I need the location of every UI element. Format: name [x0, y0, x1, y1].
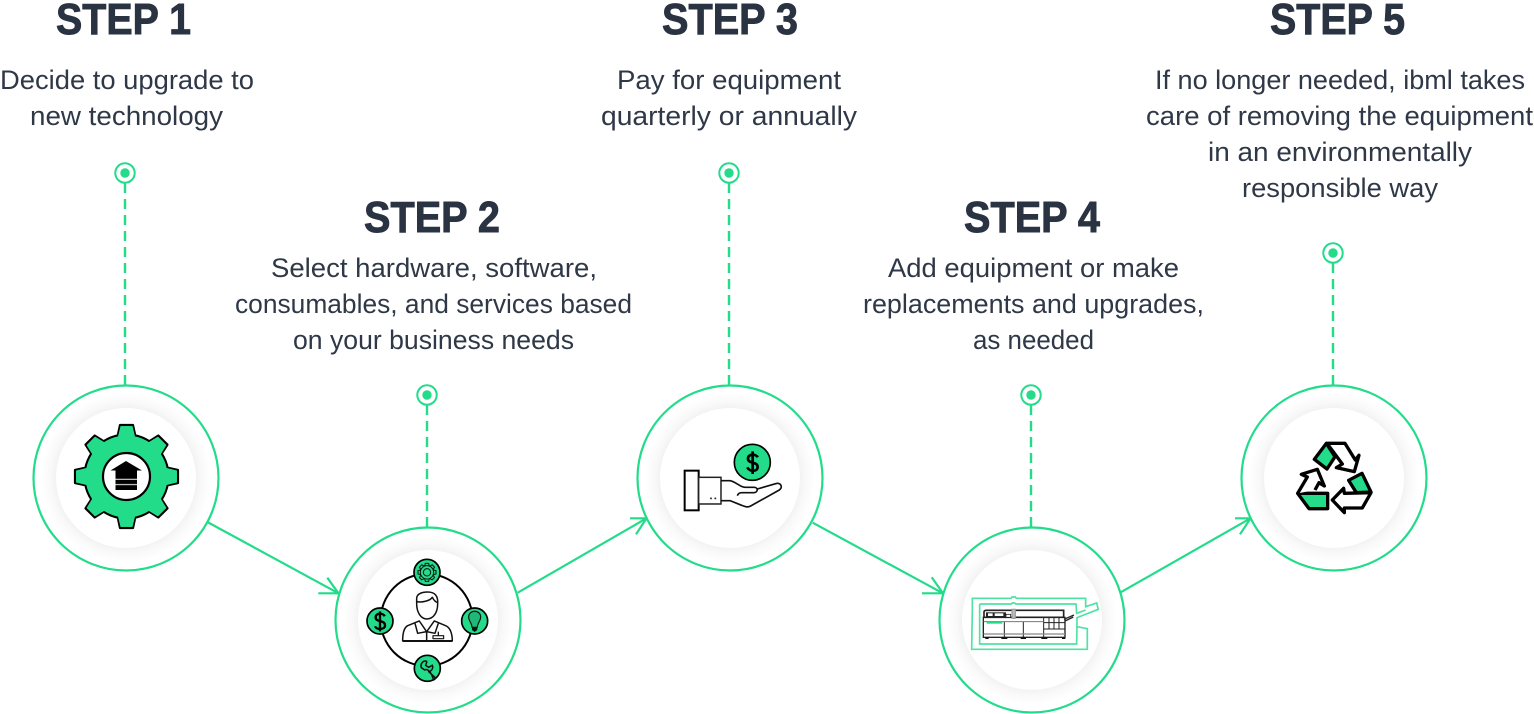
circle: step 3 [638, 386, 822, 570]
icon: recycling arrows [1298, 443, 1371, 513]
icon: person with four service badges [367, 559, 488, 681]
step 5 heading and text: If no longer needed, ibml takes [1155, 65, 1525, 95]
connector: step 4 pin [1021, 385, 1041, 527]
step 4 heading and text: Add equipment or make [888, 253, 1179, 283]
arrow: step 2 to step 3 [518, 518, 646, 593]
coin [734, 444, 770, 480]
step 1 heading and text: new technology [30, 101, 224, 131]
connector: step 2 pin [417, 385, 437, 527]
arrow: step 4 to step 5 [1120, 518, 1250, 593]
step 2 heading and text: consumables, and services based [235, 289, 632, 319]
connector: step 5 pin [1323, 243, 1343, 385]
step 5 heading and text: responsible way [1242, 173, 1438, 203]
badge: gear [414, 559, 440, 585]
badge: wrench [414, 655, 440, 681]
connector: step 3 pin [719, 163, 739, 385]
circle: step 4 [940, 528, 1124, 712]
step 5 heading and text [1146, 0, 1534, 203]
step 3 heading and text: Pay for equipment [617, 65, 842, 95]
arrow: step 3 to step 4 [813, 523, 943, 593]
circle: step 5 [1242, 386, 1426, 570]
step 4 heading and text: as needed [973, 325, 1094, 355]
step 2 heading and text: on your business needs [293, 325, 574, 355]
connector: step 1 pin [115, 163, 135, 385]
person [402, 592, 453, 641]
outline: green machine halo [972, 597, 1098, 649]
step 5 heading and text: care of removing the equipment [1146, 101, 1534, 131]
step 2 heading and text: STEP 2 [364, 193, 500, 242]
badge: dollar [367, 608, 393, 634]
arrow: step 1 to step 2 [207, 522, 338, 593]
circle: step 2 [336, 528, 520, 712]
step 2 heading and text [235, 193, 632, 355]
icon: hand with coin [685, 444, 781, 510]
step 4 heading and text: replacements and upgrades, [863, 289, 1204, 319]
icon: gear with upward arrow [75, 425, 178, 528]
step 3 heading and text [601, 0, 858, 131]
step 4 heading and text [863, 193, 1204, 355]
step 2 heading and text: Select hardware, software, [271, 253, 597, 283]
circle: step 1 [34, 386, 218, 570]
badge: light bulb [462, 608, 488, 634]
icon: production scanner machine [972, 597, 1098, 649]
machine body [983, 609, 1074, 637]
step 1 heading and text [0, 0, 254, 131]
step 4 heading and text: STEP 4 [964, 193, 1100, 242]
step 3 heading and text: quarterly or annually [601, 101, 858, 131]
step 1 heading and text: Decide to upgrade to [0, 65, 254, 95]
step 5 heading and text: in an environmentally [1208, 137, 1473, 167]
